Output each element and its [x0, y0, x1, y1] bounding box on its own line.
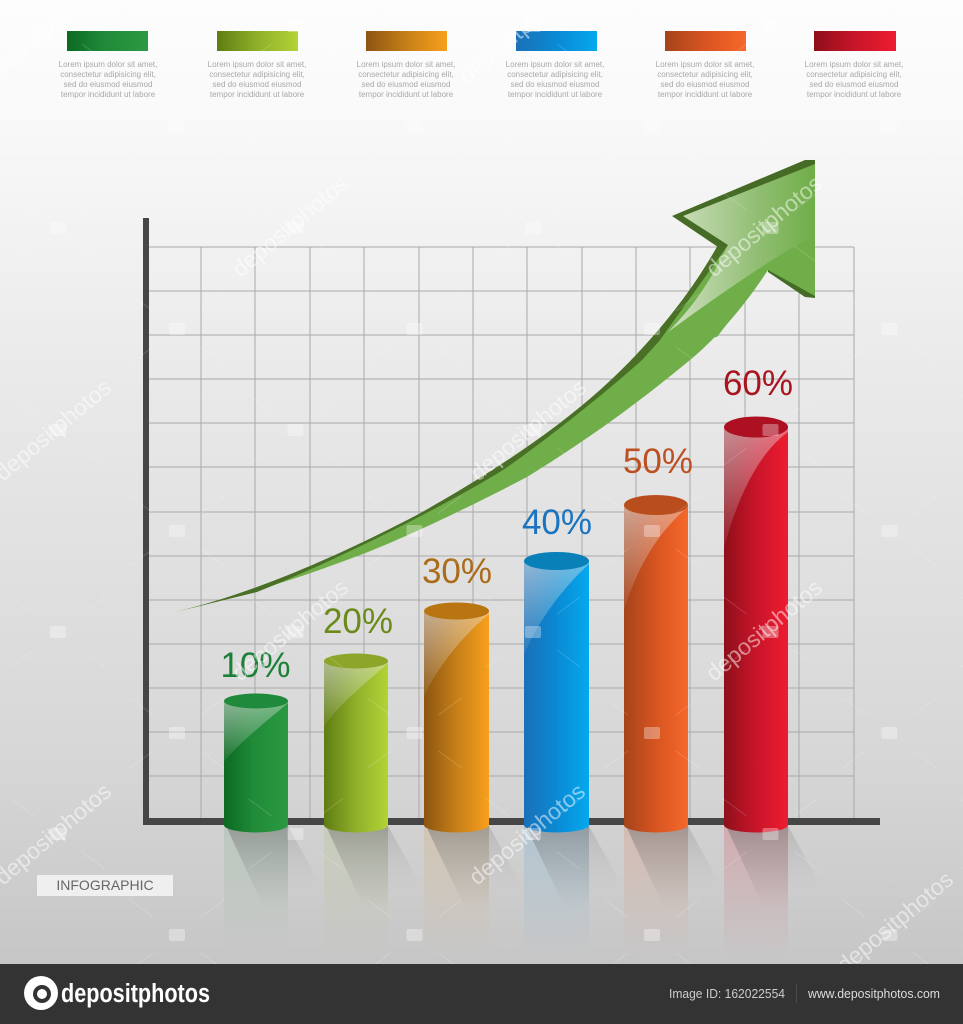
legend item 5: [656, 31, 754, 99]
bar 50%: [623, 442, 693, 833]
bar 20%: [323, 602, 393, 833]
chart grid: [148, 247, 854, 820]
legend item 5: consectetur adipisicing elit,: [657, 70, 753, 79]
arrow dark edge: [175, 245, 728, 612]
legend item 2: Lorem ipsum dolor sit amet,: [208, 60, 306, 69]
legend item 6: [805, 31, 903, 99]
bar 60%: [723, 364, 793, 833]
legend item 2: sed do eiusmod eiusmod: [213, 80, 301, 89]
legend item 1: Lorem ipsum dolor sit amet,: [59, 60, 157, 69]
bar 20%: 20%: [323, 602, 393, 641]
watermarks: depositphotos: [832, 866, 958, 978]
legend item 6: sed do eiusmod eiusmod: [810, 80, 898, 89]
arrow head back edge: [672, 160, 815, 298]
infographic tag: INFOGRAPHIC: [56, 877, 154, 893]
image id: Image ID: 162022554: [669, 987, 785, 1001]
arrow head highlight: [668, 164, 815, 332]
website: www.depositphotos.com: [807, 987, 940, 1001]
legend item 1: consectetur adipisicing elit,: [60, 70, 156, 79]
infographic tag: [37, 875, 173, 896]
watermarks: depositphotos: [464, 778, 590, 890]
bar 10%: 10%: [220, 646, 291, 685]
legend item 2: [208, 31, 306, 99]
bar 10%: [220, 646, 291, 833]
chart axes: [143, 218, 880, 825]
legend item 2: tempor incididunt ut labore: [210, 90, 305, 99]
bar 60%: 60%: [723, 364, 793, 403]
legend item 3: [357, 31, 455, 99]
bar 50%: 50%: [623, 442, 693, 481]
watermarks: depositphotos: [701, 574, 827, 686]
bar 30%: 30%: [422, 552, 492, 591]
legend item 5: tempor incididunt ut labore: [658, 90, 753, 99]
legend item 4: sed do eiusmod eiusmod: [511, 80, 599, 89]
legend item 4: Lorem ipsum dolor sit amet,: [506, 60, 604, 69]
bar 40%: 40%: [522, 503, 592, 542]
arrow head lower: [660, 215, 815, 340]
arrow shaft: [175, 245, 768, 612]
watermarks: depositphotos: [227, 170, 353, 282]
legend item 3: sed do eiusmod eiusmod: [362, 80, 450, 89]
watermarks: depositphotos: [701, 170, 827, 282]
legend item 5: sed do eiusmod eiusmod: [661, 80, 749, 89]
watermarks: depositphotos: [227, 574, 353, 686]
footer logo icon: [24, 976, 58, 1010]
watermarks: depositphotos: [465, 374, 591, 486]
legend item 4: consectetur adipisicing elit,: [507, 70, 603, 79]
legend item 3: Lorem ipsum dolor sit amet,: [357, 60, 455, 69]
legend item 2: consectetur adipisicing elit,: [209, 70, 305, 79]
legend item 3: consectetur adipisicing elit,: [358, 70, 454, 79]
legend item 6: consectetur adipisicing elit,: [806, 70, 902, 79]
growth arrow: [175, 160, 815, 612]
bar reflections and shadows: [224, 826, 822, 956]
legend item 6: tempor incididunt ut labore: [807, 90, 902, 99]
legend item 1: tempor incididunt ut labore: [61, 90, 156, 99]
bar 30%: [422, 552, 492, 833]
bar 40%: [522, 503, 592, 833]
legend row: [59, 31, 903, 99]
legend item 1: sed do eiusmod eiusmod: [64, 80, 152, 89]
legend item 4: [506, 31, 604, 99]
footer logo text: depositphotos: [61, 980, 210, 1008]
legend item 1: [59, 31, 157, 99]
legend item 5: Lorem ipsum dolor sit amet,: [656, 60, 754, 69]
legend item 6: Lorem ipsum dolor sit amet,: [805, 60, 903, 69]
legend item 4: tempor incididunt ut labore: [508, 90, 603, 99]
legend item 3: tempor incididunt ut labore: [359, 90, 454, 99]
footer bar: [0, 964, 963, 1024]
